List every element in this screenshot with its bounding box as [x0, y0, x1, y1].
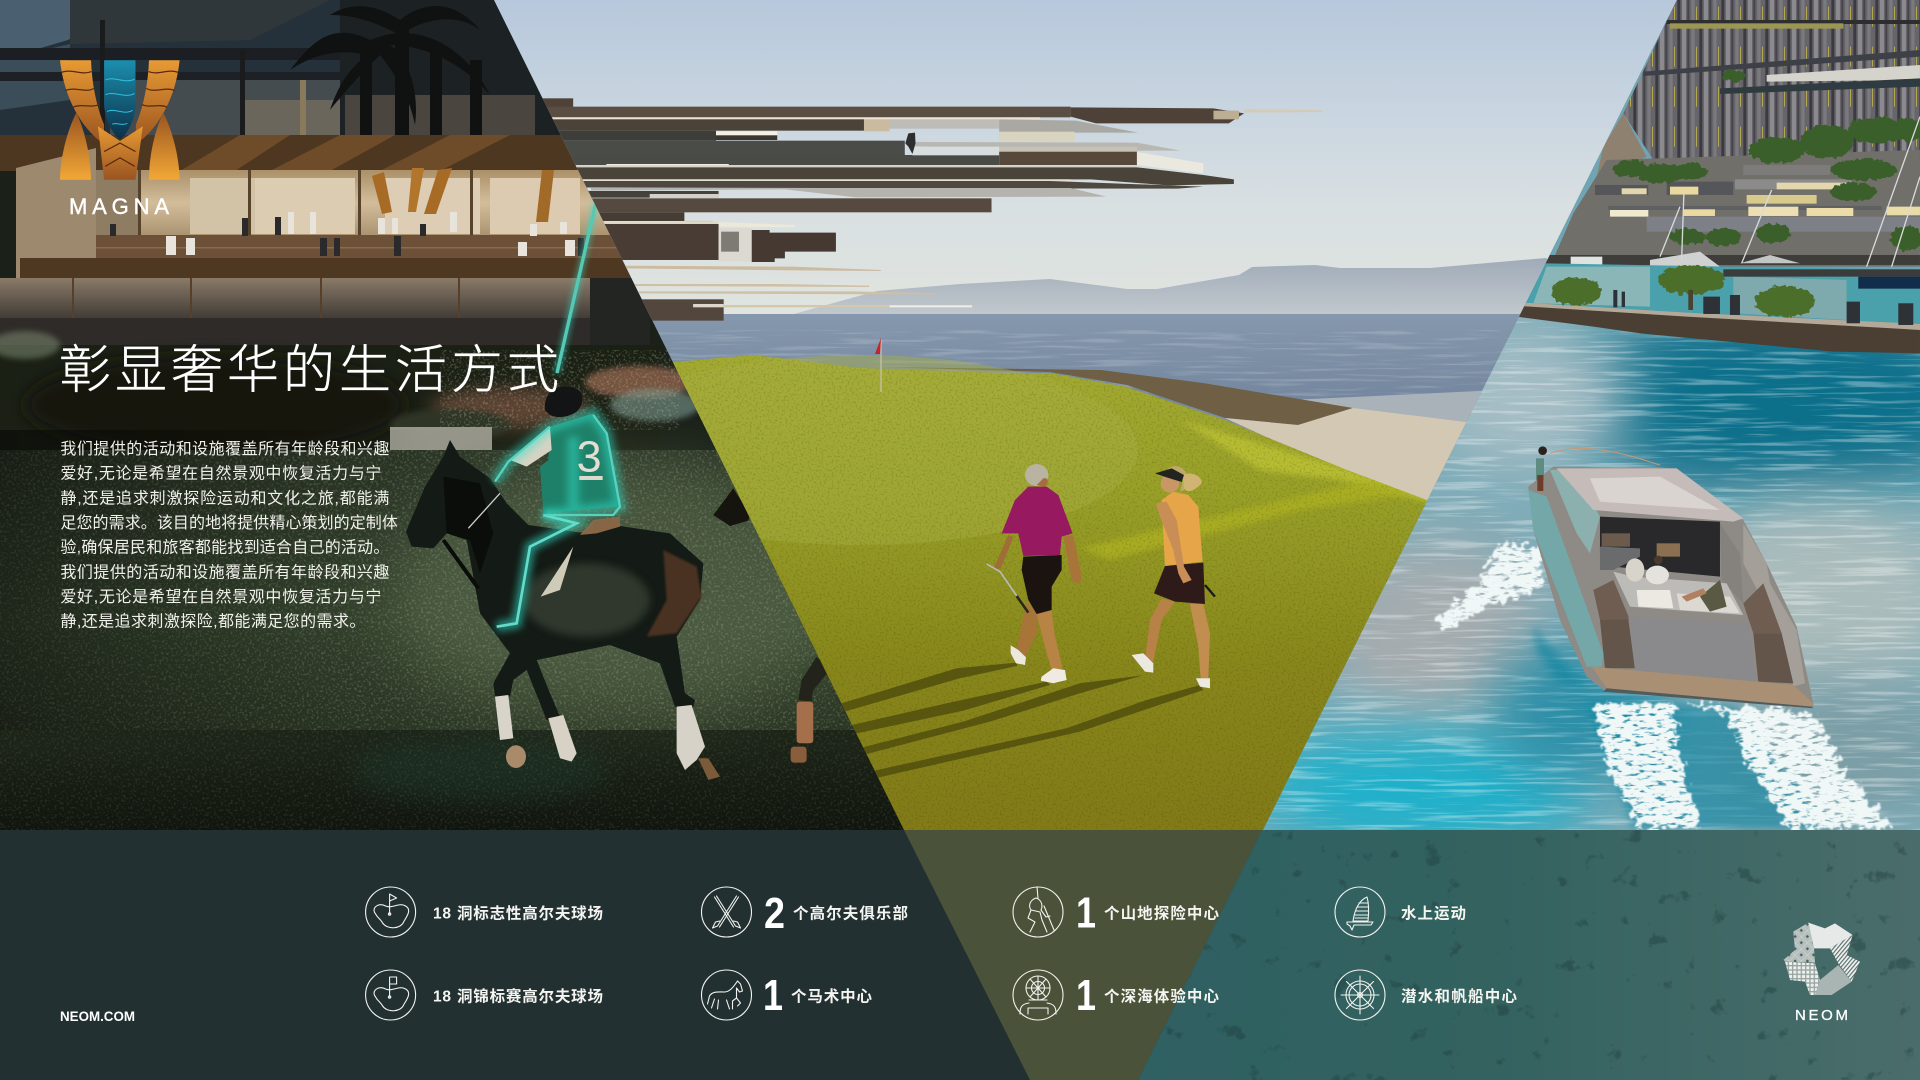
- body paragraph: 爱好,无论是希望在自然景观中恢复活力与宁: [60, 465, 381, 483]
- body paragraph: 验,确保居民和旅客都能找到适合自己的活动。: [60, 539, 389, 557]
- teal polo mallet line: [557, 202, 596, 373]
- band: teal reef section: [1138, 830, 1920, 1080]
- band: olive middle section: [904, 830, 1262, 1080]
- NEOM logo: [1783, 923, 1860, 1024]
- garden hedge and flowers: [0, 331, 700, 455]
- body paragraph: [60, 440, 398, 631]
- icon: championship course green: [366, 970, 416, 1020]
- label: 18 洞锦标赛高尔夫球场: [433, 986, 603, 1006]
- body paragraph: 静,还是追求刺激探险,都能满足您的需求。: [60, 613, 365, 631]
- golfer in orange top: [1132, 466, 1215, 688]
- feature: 1 deep-sea experience centre: [1013, 970, 1219, 1020]
- body paragraph: 爱好,无论是希望在自然景观中恢复活力与宁: [60, 588, 381, 606]
- label: 个高尔夫俱乐部: [793, 904, 908, 923]
- icon: diving helmet: [1013, 970, 1063, 1020]
- feature: diving and sailing centre: [1335, 970, 1517, 1020]
- icon: crossed golf clubs: [702, 887, 752, 937]
- distant mountains: [794, 258, 1548, 314]
- number: 2: [764, 889, 785, 938]
- label: 个马术中心: [791, 988, 872, 1006]
- logo wordmark: MAGNA: [69, 194, 169, 219]
- feature: 2 golf clubs: [702, 887, 908, 938]
- yacht wake and foam: [1437, 543, 1893, 828]
- polo horse and glowing rider: 3: [577, 434, 602, 482]
- panel: marina and yacht scene: [1250, 0, 1920, 850]
- title: 彰显奢华的生活方式: [59, 342, 559, 400]
- feature: signature 18-hole golf course: [366, 887, 603, 937]
- icon: windsurf sail: [1335, 887, 1385, 937]
- logo mark: [60, 60, 180, 180]
- clubhouse terrace: [0, 135, 650, 358]
- waterfront building facade: [1597, 0, 1920, 177]
- body paragraph: 我们提供的活动和设施覆盖所有年龄段和兴趣: [60, 563, 389, 581]
- panel: polo and clubhouse scene: [0, 0, 910, 830]
- feature: water sports: [1335, 887, 1466, 937]
- number: 1: [1076, 971, 1096, 1020]
- body paragraph: 静,还是追求刺激探险运动和文化之旅,都能满: [60, 489, 389, 507]
- sea: [649, 314, 1520, 454]
- website: NEOM.COM: [60, 1008, 135, 1024]
- golfer shadows: [842, 662, 1204, 778]
- number: 1: [1076, 888, 1096, 938]
- terraced villas and trees: [1543, 70, 1920, 267]
- label: 个山地探险中心: [1104, 904, 1219, 923]
- icon: climber: [1013, 887, 1063, 937]
- label: 潜水和帆船中心: [1401, 986, 1517, 1006]
- logo mark: [1783, 923, 1860, 995]
- bottom band: dark left section: [904, 830, 1920, 1080]
- body paragraph: 我们提供的活动和设施覆盖所有年龄段和兴趣: [60, 440, 389, 458]
- golf fairway: [672, 355, 1428, 830]
- number: 1: [763, 971, 783, 1020]
- panel: golf course scene: [490, 0, 1690, 830]
- MAGNA logo: [60, 60, 180, 219]
- polo horse and glowing rider: [406, 386, 720, 780]
- marina basin, quay and planters: [1517, 117, 1920, 353]
- futuristic cantilevered building: [509, 98, 1323, 321]
- icon: ship wheel: [1335, 970, 1385, 1020]
- icon: signature course green: [366, 887, 416, 937]
- label: 个深海体验中心: [1104, 986, 1219, 1006]
- shoreline rocks and beach: [880, 367, 1490, 505]
- label: 水上运动: [1401, 905, 1466, 923]
- flag pin: [875, 338, 881, 392]
- logo wordmark: NEOM: [1795, 1007, 1848, 1024]
- feature: 1 mountain adventure centre: [1013, 887, 1219, 938]
- golfer in magenta shirt: [987, 464, 1082, 683]
- second horse fragments: [713, 488, 830, 763]
- water colour field: [1250, 300, 1920, 850]
- icon: horse: [702, 970, 752, 1020]
- luxury yacht: [1528, 446, 1813, 708]
- polo lawn: [0, 430, 910, 830]
- body paragraph: 足您的需求。该目的地将提供精心策划的定制体: [60, 514, 398, 532]
- feature: 1 equestrian centre: [702, 970, 872, 1020]
- feature: championship 18-hole golf course: [366, 970, 603, 1020]
- spectators on terrace: [110, 212, 584, 256]
- label: 18 洞标志性高尔夫球场: [433, 904, 603, 923]
- clubhouse roof and palms: [0, 0, 560, 140]
